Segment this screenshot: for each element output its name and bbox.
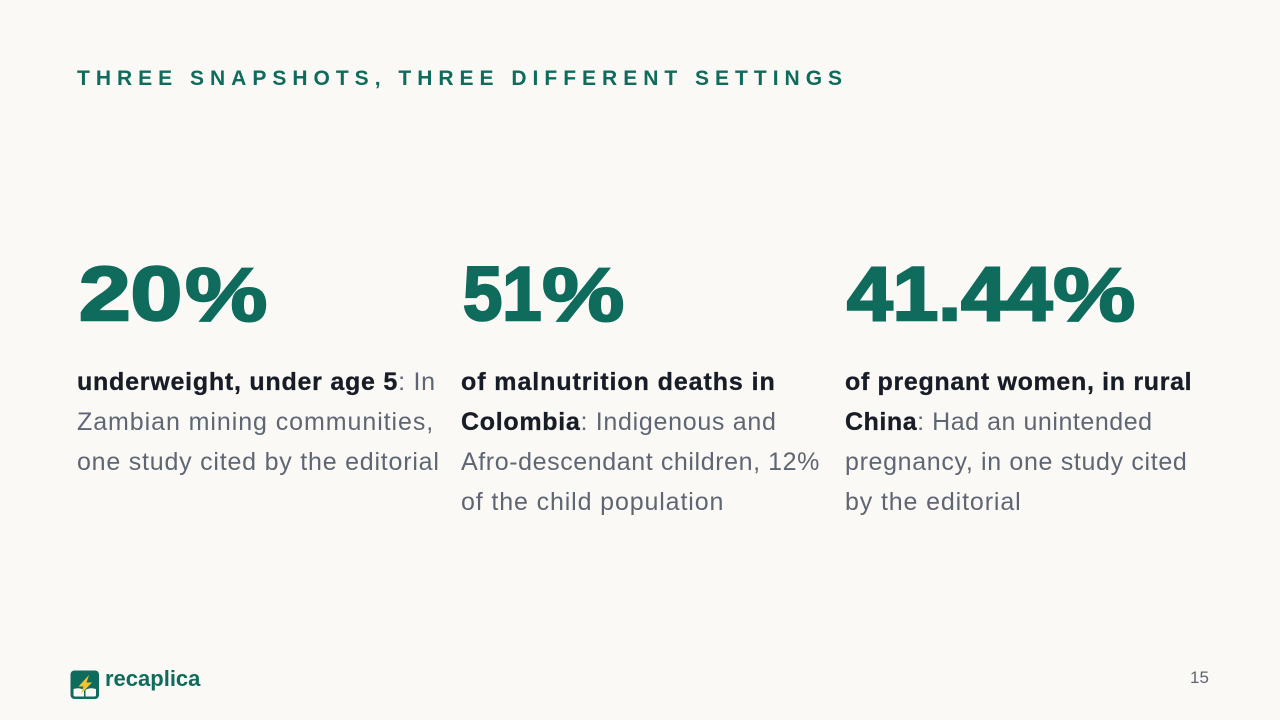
heading: THREE SNAPSHOTS, THREE DIFFERENT SETTINGS (77, 67, 848, 90)
brand name: recaplica (105, 666, 200, 691)
number: 51%: % (542, 253, 624, 338)
text: Colombia description (461, 368, 820, 516)
text: Zambia description: underweight, under age 5: In (77, 368, 436, 396)
icon: recaplica logo (70, 670, 99, 699)
panel: stat China (845, 252, 1192, 516)
text: China description: of pregnant women, in rural (845, 368, 1192, 396)
number: 20%: % (185, 253, 267, 338)
text: Zambia description: one study cited by the editorial (77, 448, 440, 476)
number: 51%: 51 (463, 252, 542, 337)
text: China description (845, 368, 1192, 516)
text: Zambia description (77, 368, 440, 476)
text: Colombia description: of malnutrition deaths in (461, 368, 776, 396)
text: China description: China: Had an unintended (845, 408, 1153, 436)
number: 51% (463, 252, 624, 338)
text: Colombia description: of the child population (461, 488, 724, 516)
number: 20%: 20 (79, 252, 182, 337)
page number: 15 (1190, 668, 1209, 687)
panel: stat Zambia (77, 252, 440, 476)
text: Colombia description: Afro-descendant children, 12% (461, 448, 820, 476)
text: Colombia description: Colombia: Indigenous and (461, 408, 777, 436)
number: 41.44%: 41.44 (847, 252, 1052, 337)
text: China description: by the editorial (845, 488, 1022, 516)
text: Zambia description: Zambian mining communities, (77, 408, 434, 436)
text: China description: pregnancy, in one study cited (845, 448, 1188, 476)
panel: stat Colombia (461, 252, 820, 516)
number: 41.44%: % (1053, 253, 1135, 338)
number: 20% (79, 252, 267, 338)
